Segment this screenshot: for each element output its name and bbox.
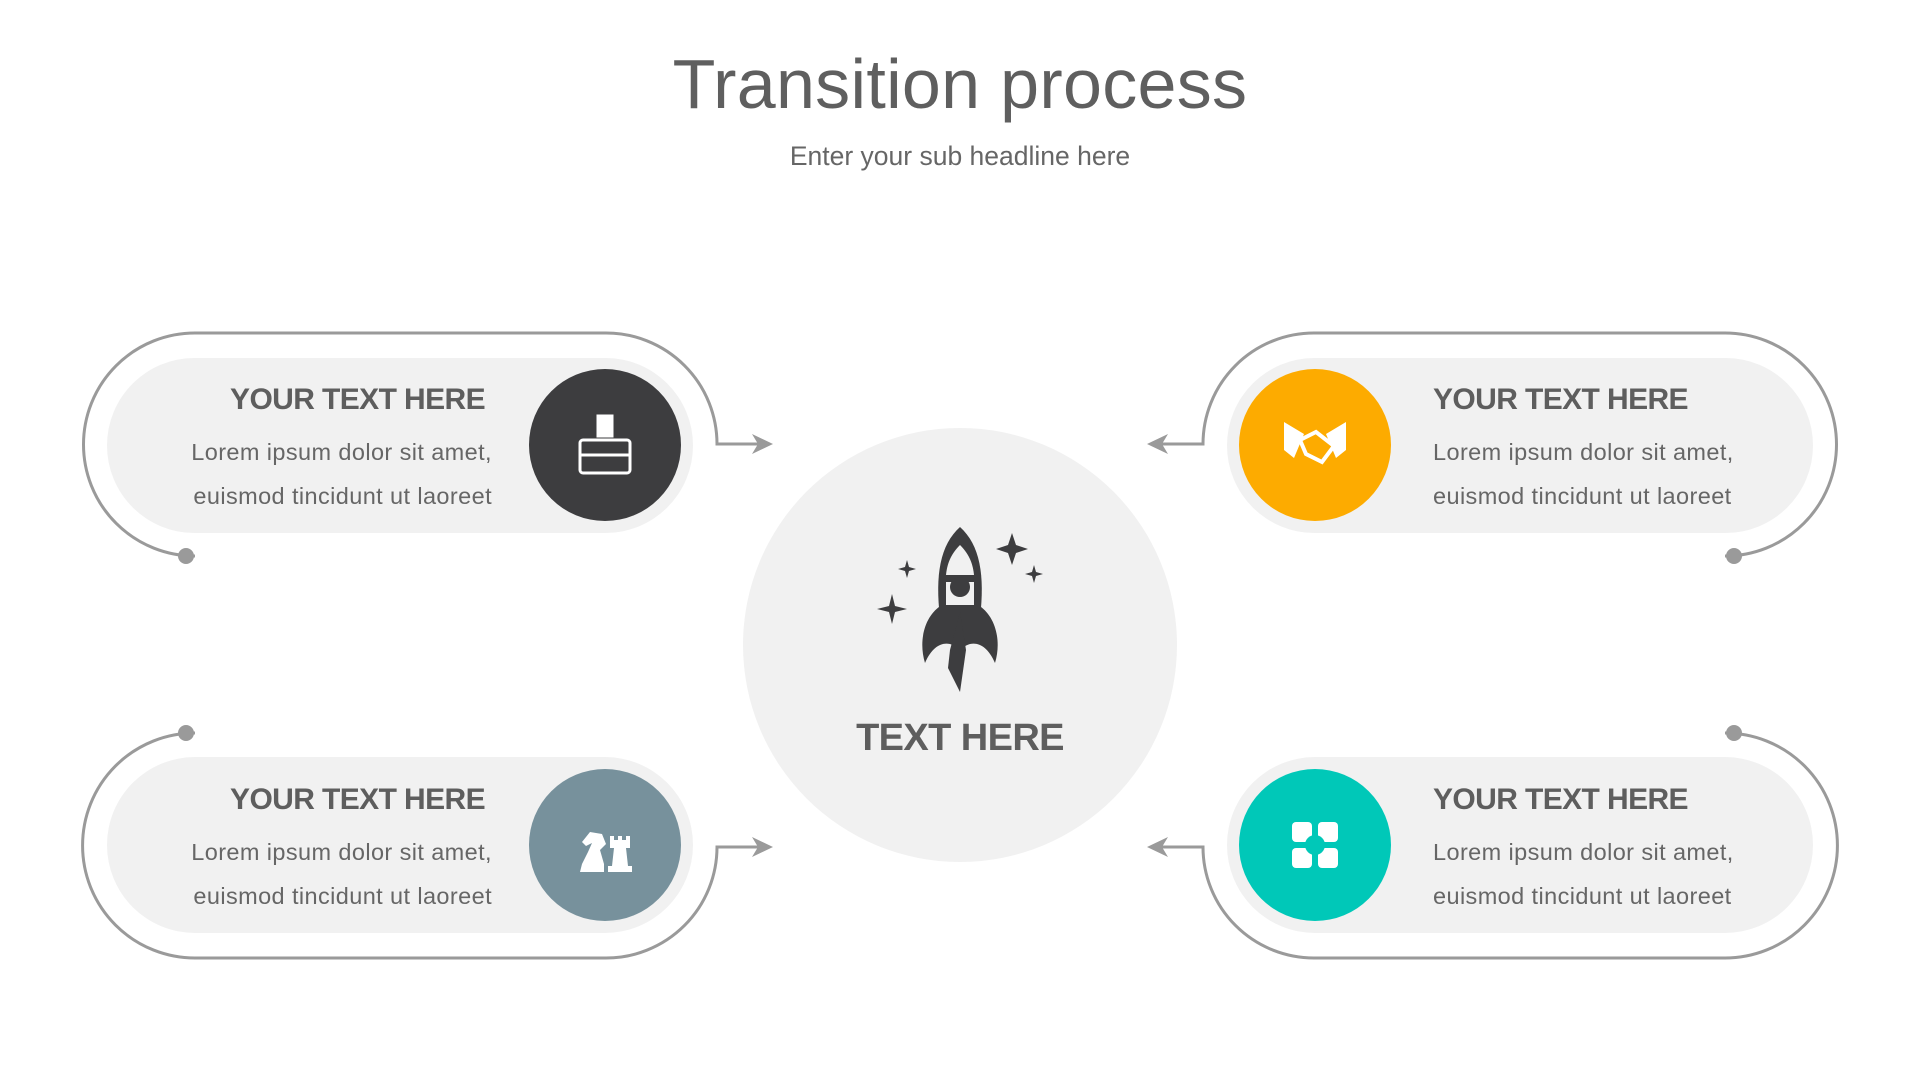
text: top-left: Lorem ipsum dolor sit amet, (191, 439, 492, 465)
text: bottom-right: euismod tincidunt ut laoreet (1433, 883, 1732, 909)
text: top-right: Lorem ipsum dolor sit amet, (1433, 439, 1734, 465)
center label: TEXT HERE (856, 717, 1064, 759)
icon: handshake (1284, 422, 1346, 462)
icon circles (529, 369, 681, 521)
subtitle: Enter your sub headline here (790, 141, 1130, 171)
icon: rocket (877, 527, 1043, 692)
icon: hands (1292, 822, 1338, 868)
text: bottom-right: Lorem ipsum dolor sit amet, (1433, 839, 1734, 865)
text: top-left (191, 383, 492, 509)
pills (107, 358, 1813, 933)
text: bottom-right: YOUR TEXT HERE (1433, 783, 1688, 816)
icon: briefcase (580, 416, 630, 473)
text: top-left: YOUR TEXT HERE (230, 383, 485, 416)
title: Transition process (673, 45, 1247, 123)
text: bottom-left (191, 783, 492, 909)
text: top-left: euismod tincidunt ut laoreet (193, 483, 492, 509)
text: top-right: YOUR TEXT HERE (1433, 383, 1688, 416)
text: bottom-left: YOUR TEXT HERE (230, 783, 485, 816)
text: bottom-right (1433, 783, 1734, 909)
text: top-right: euismod tincidunt ut laoreet (1433, 483, 1732, 509)
connectors (83, 333, 1837, 958)
text: top-right (1433, 383, 1734, 509)
text: bottom-left: Lorem ipsum dolor sit amet, (191, 839, 492, 865)
text: bottom-left: euismod tincidunt ut laoreet (193, 883, 492, 909)
icon: chess (580, 832, 632, 872)
